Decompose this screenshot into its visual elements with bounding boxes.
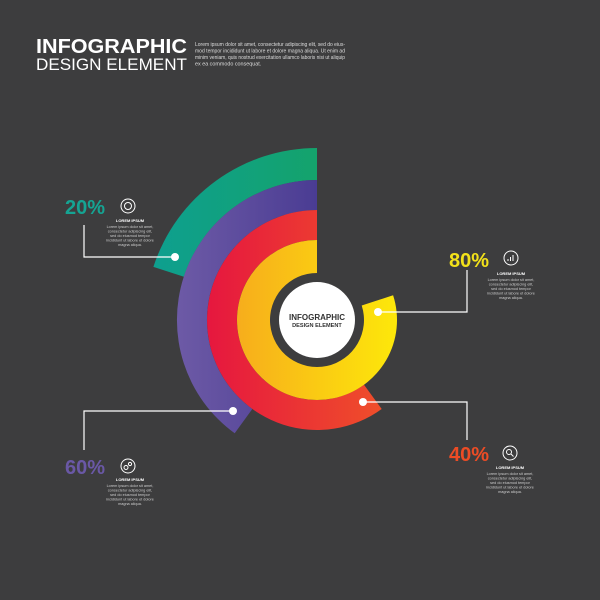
- intro text: ex ea commodo consequat.: [195, 62, 261, 68]
- icon: chart: [504, 251, 518, 265]
- label: 60%: [65, 457, 154, 506]
- center circle: [279, 282, 355, 358]
- label: 40%: sed do eiusmod tempor: [490, 481, 531, 485]
- label: 80%: magna aliqua.: [499, 296, 523, 300]
- label: 60%: magna aliqua.: [118, 502, 142, 506]
- arc: red 60%: [207, 210, 382, 430]
- label: 60%: 60%: [65, 457, 105, 479]
- center circle: INFOGRAPHIC: [289, 313, 345, 322]
- label: 20%: incididunt ut labore et dolore: [106, 238, 154, 242]
- label: 80%: LOREM IPSUM: [497, 271, 526, 276]
- label: 60%: sed do eiusmod tempor: [110, 493, 151, 497]
- label: 40%: 40%: [449, 444, 489, 466]
- label: 60%: consectetur adipiscing elit,: [108, 488, 152, 492]
- intro text: Lorem ipsum dolor sit amet, consectetur adipiscing elit, sed do eius-: [195, 42, 345, 48]
- label: 20%: sed do eiusmod tempor: [110, 234, 151, 238]
- label: 20%: 20%: [65, 197, 105, 219]
- label: 40%: magna aliqua.: [498, 490, 522, 494]
- label: 80%: [449, 250, 535, 300]
- icon: gears: [121, 459, 135, 473]
- label: 60%: LOREM IPSUM: [116, 477, 145, 482]
- label: 80%: 80%: [449, 250, 489, 272]
- center circle: DESIGN ELEMENT: [292, 323, 342, 329]
- label: 80%: sed do eiusmod tempor: [491, 287, 532, 291]
- intro text: minim veniam, quis nostrud exercitation ullamco laboris nisi ut aliquip: [195, 55, 345, 61]
- arc: purple 40%: [177, 180, 317, 433]
- connector lines: [84, 225, 467, 450]
- label: 20%: [65, 197, 154, 247]
- icon: magnifier: [503, 446, 517, 460]
- label: 80%: incididunt ut labore et dolore: [487, 292, 535, 296]
- chart: concentric arcs: [153, 148, 397, 433]
- label: 20%: Lorem ipsum dolor sit amet,: [107, 225, 153, 229]
- label: 40%: consectetur adipiscing elit,: [488, 476, 532, 480]
- intro text: [195, 42, 345, 68]
- arc: yellow 80%: [237, 240, 397, 400]
- icon: globe: [121, 199, 135, 213]
- label: 80%: consectetur adipiscing elit,: [489, 282, 533, 286]
- label: 40%: Lorem ipsum dolor sit amet,: [487, 472, 533, 476]
- label: 20%: LOREM IPSUM: [116, 218, 145, 223]
- label: 40%: incididunt ut labore et dolore: [486, 486, 534, 490]
- title: [36, 36, 187, 74]
- title: INFOGRAPHIC: [36, 36, 187, 58]
- label: 60%: incididunt ut labore et dolore: [106, 498, 154, 502]
- label: 40%: LOREM IPSUM: [496, 465, 525, 470]
- label: 40%: [449, 444, 534, 494]
- intro text: mod tempor incididunt ut labore et dolore magna aliqua. Ut enim ad: [195, 48, 345, 54]
- connector dots: [171, 253, 382, 415]
- title: DESIGN ELEMENT: [36, 55, 187, 74]
- label: 60%: Lorem ipsum dolor sit amet,: [107, 484, 153, 488]
- label: 20%: consectetur adipiscing elit,: [108, 230, 152, 234]
- label: 80%: Lorem ipsum dolor sit amet,: [488, 278, 534, 282]
- label: 20%: magna aliqua.: [118, 243, 142, 247]
- arc: green 20%: [153, 148, 317, 277]
